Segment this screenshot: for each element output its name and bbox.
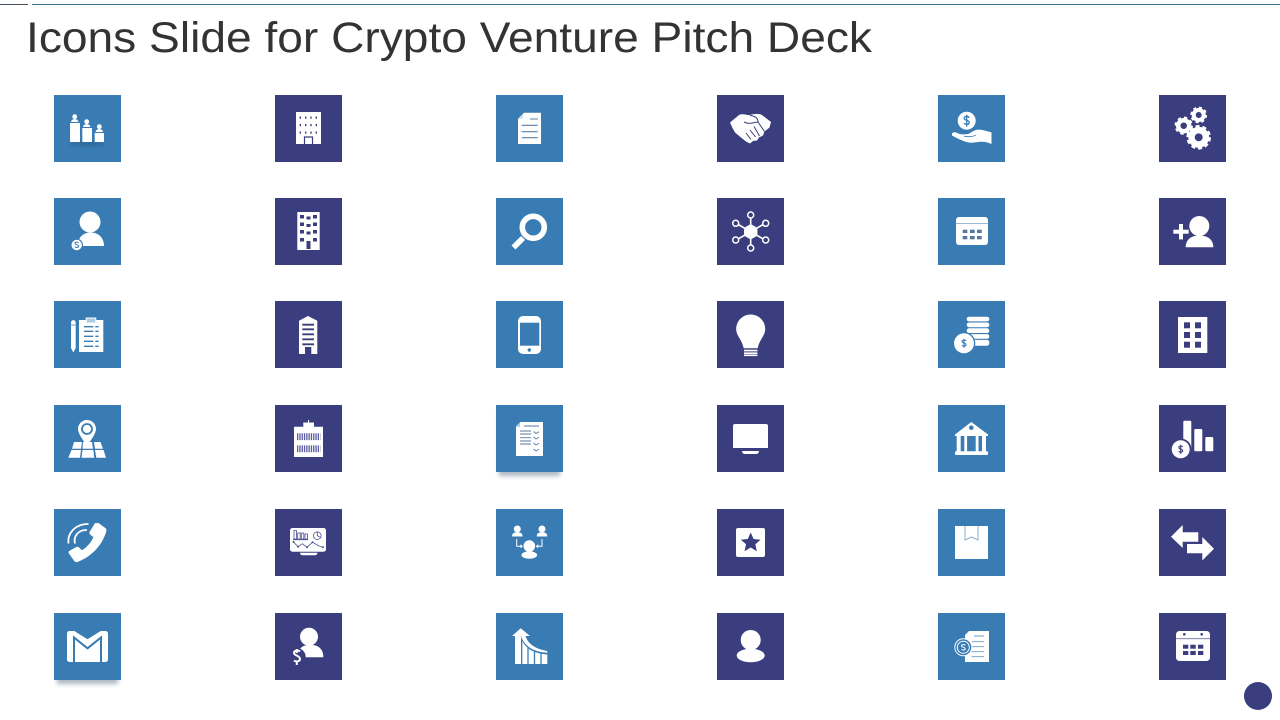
tile: checklist with shadow (496, 405, 563, 476)
icon: growth chart (512, 628, 547, 664)
tile: star box (717, 509, 784, 576)
icon: headquarters (294, 420, 323, 457)
title: Icons Slide for Crypto Venture Pitch Deck (26, 14, 873, 62)
icon: document (518, 113, 541, 144)
tile: exchange arrows (1159, 509, 1226, 576)
icon: people flow (512, 526, 547, 559)
tile: document (496, 95, 563, 162)
icon: calendar (1176, 631, 1210, 661)
icon: phone call (68, 523, 106, 562)
icon: people podium (69, 114, 105, 146)
tile: envelope with shadow (54, 613, 121, 684)
tile: magnifier (496, 198, 563, 265)
icon: handshake (730, 114, 771, 144)
tile: people on podium (54, 95, 121, 162)
tile: grid building (1159, 301, 1226, 368)
tile: phone call (54, 509, 121, 576)
tile: document with coin (938, 613, 1005, 680)
tile: growth chart (496, 613, 563, 680)
icon: checklist (516, 422, 543, 456)
icon: person with coin (70, 212, 104, 251)
icon: gears (1176, 108, 1210, 148)
icon: bar chart with coin (1170, 421, 1213, 460)
tile: light bulb (717, 301, 784, 368)
icon: bank (955, 422, 988, 455)
icon: person with dollar (288, 628, 323, 666)
tile: add person (1159, 198, 1226, 265)
icon: map pin (68, 420, 106, 458)
tile: dashboard monitor (275, 509, 342, 576)
icon: dashboard monitor (290, 528, 326, 555)
tile: smartphone (496, 301, 563, 368)
tile: headquarters (275, 405, 342, 472)
tile: person (717, 613, 784, 680)
tile: parcel box (938, 509, 1005, 576)
tile: investor person (54, 198, 121, 265)
icon: star box (736, 528, 765, 557)
icon: clipboard and pencil (71, 318, 103, 352)
icon: add person (1173, 216, 1213, 247)
icon: monitor (733, 424, 768, 454)
tile: hand holding coin (938, 95, 1005, 162)
icon: person (737, 630, 765, 662)
top rule (0, 4, 1280, 5)
icon: hand with coin (952, 112, 992, 144)
tile: handshake (717, 95, 784, 162)
tile: bar chart with coin (1159, 405, 1226, 472)
icon: tower (299, 316, 317, 354)
icon: light bulb (736, 314, 765, 356)
icon: apartment building (297, 212, 320, 250)
icon: calendar (956, 217, 988, 245)
tile: map pin (54, 405, 121, 472)
tile: people flow (496, 509, 563, 576)
page marker circle (1244, 682, 1272, 710)
tile: calendar light (938, 198, 1005, 265)
tile: clipboard (54, 301, 121, 368)
tile: tower (275, 301, 342, 368)
tile: calendar dark (1159, 613, 1226, 680)
icon: coin stack (953, 317, 989, 355)
icon: exchange arrows (1171, 525, 1214, 560)
icon: office building (296, 112, 321, 144)
icon: network (733, 212, 769, 251)
icon: grid building (1178, 317, 1207, 353)
tile: person with dollar (275, 613, 342, 680)
tile: network (717, 198, 784, 265)
tile: bank (938, 405, 1005, 472)
tile: office building (275, 95, 342, 162)
icon: smartphone (518, 316, 541, 354)
tile: gears (1159, 95, 1226, 162)
tile: apartment building (275, 198, 342, 265)
tile: monitor (717, 405, 784, 472)
tile: coin stack (938, 301, 1005, 368)
icon: document with coin (955, 631, 989, 662)
icon: magnifier (514, 216, 544, 248)
icon: parcel box (955, 526, 988, 559)
icon: envelope (67, 630, 108, 662)
